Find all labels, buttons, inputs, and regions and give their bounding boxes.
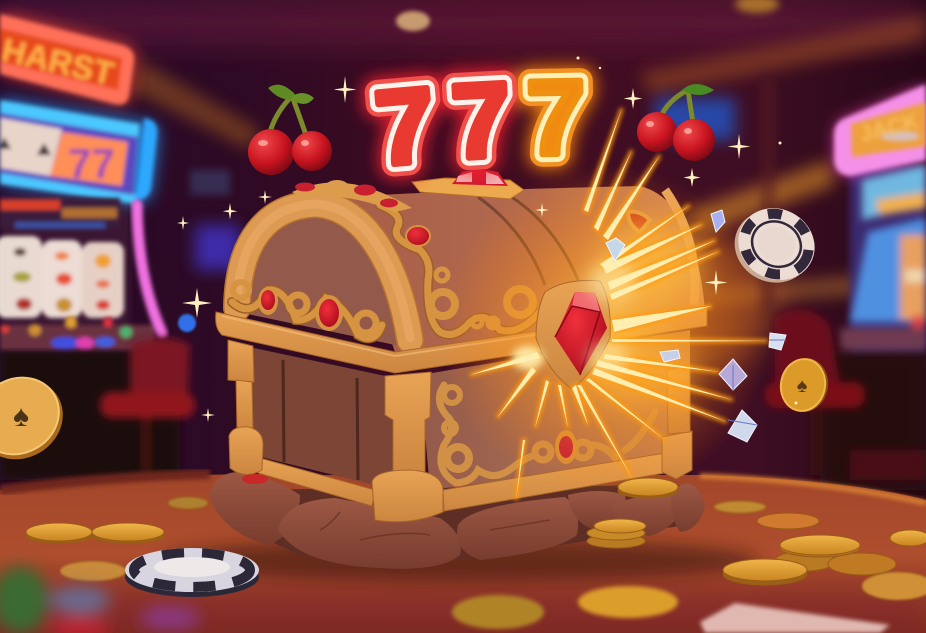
small ruby: lower	[555, 430, 577, 464]
poker chip: floating right	[722, 194, 827, 297]
neon sign: top right: JACK	[857, 108, 921, 147]
foreground blurred details	[0, 566, 200, 633]
third seven: 7	[526, 58, 587, 178]
blurred foreground coins	[452, 586, 678, 629]
coin: floating right with spade	[777, 354, 832, 416]
scroll decoration: centre	[380, 205, 540, 334]
reels	[0, 198, 124, 318]
neon 777 sign	[371, 58, 587, 188]
sparkles	[177, 56, 798, 422]
neon sign: top right	[834, 84, 926, 176]
rock: right group	[568, 491, 626, 530]
scroll decoration: lower	[439, 385, 655, 483]
first seven: 7	[371, 66, 440, 188]
treasure chest	[209, 165, 770, 569]
corner post and bands	[228, 340, 692, 522]
light rays bursting from lock	[470, 108, 768, 500]
right slot machine	[834, 84, 926, 350]
lid end clay	[238, 208, 412, 345]
third seven: 7	[526, 58, 587, 178]
burst glow	[440, 165, 770, 495]
coin: left edge with spade: ♠	[13, 400, 29, 433]
coin group right	[714, 501, 926, 600]
lid end arch	[237, 204, 410, 340]
horizontal rim band	[216, 306, 707, 373]
glow: 7	[371, 66, 440, 188]
first seven: 7	[371, 66, 440, 188]
blurred playing card	[700, 603, 890, 633]
rock: far left	[209, 472, 300, 545]
coin stack centre	[587, 478, 678, 548]
table	[0, 474, 926, 633]
poker chip on table	[125, 548, 259, 597]
machine button row	[0, 316, 155, 350]
central ruby lock	[536, 280, 610, 389]
third seven: 7	[526, 58, 587, 178]
barrel lid	[340, 186, 705, 352]
red stools	[100, 309, 926, 480]
clay rock base	[209, 472, 705, 569]
second seven: 7	[449, 61, 514, 181]
gold coins on table	[26, 478, 926, 629]
glow: 7	[526, 58, 587, 178]
neon sign: top left: HARST	[0, 31, 118, 92]
glow	[371, 58, 587, 188]
icon: left cherries	[248, 85, 332, 175]
second seven: 7	[449, 61, 514, 181]
first seven: 7	[371, 66, 440, 188]
pink neon tube	[137, 205, 162, 333]
neon sign: 77 blue panel	[0, 98, 158, 204]
small rubies: left scroll	[258, 287, 343, 331]
left slot machine	[0, 12, 196, 350]
red clay dab under left foot	[242, 474, 268, 484]
rock: near left	[278, 498, 461, 569]
coin pair left	[26, 497, 208, 581]
coin: floating right with spade: ♠	[797, 375, 808, 397]
lid top ornament	[292, 170, 650, 232]
glow: 7	[449, 61, 514, 181]
second seven: 7	[449, 61, 514, 181]
right machine screens	[840, 165, 926, 350]
neon sign: top left	[0, 12, 136, 105]
icon: right cherries	[637, 84, 715, 161]
diamonds flying	[606, 210, 786, 442]
coin: left edge with spade	[0, 363, 78, 475]
scroll decoration: left	[232, 282, 382, 338]
chest lower body	[240, 330, 690, 490]
neon sign: 77 blue panel: 77	[68, 140, 115, 187]
rock: middle	[457, 497, 578, 560]
